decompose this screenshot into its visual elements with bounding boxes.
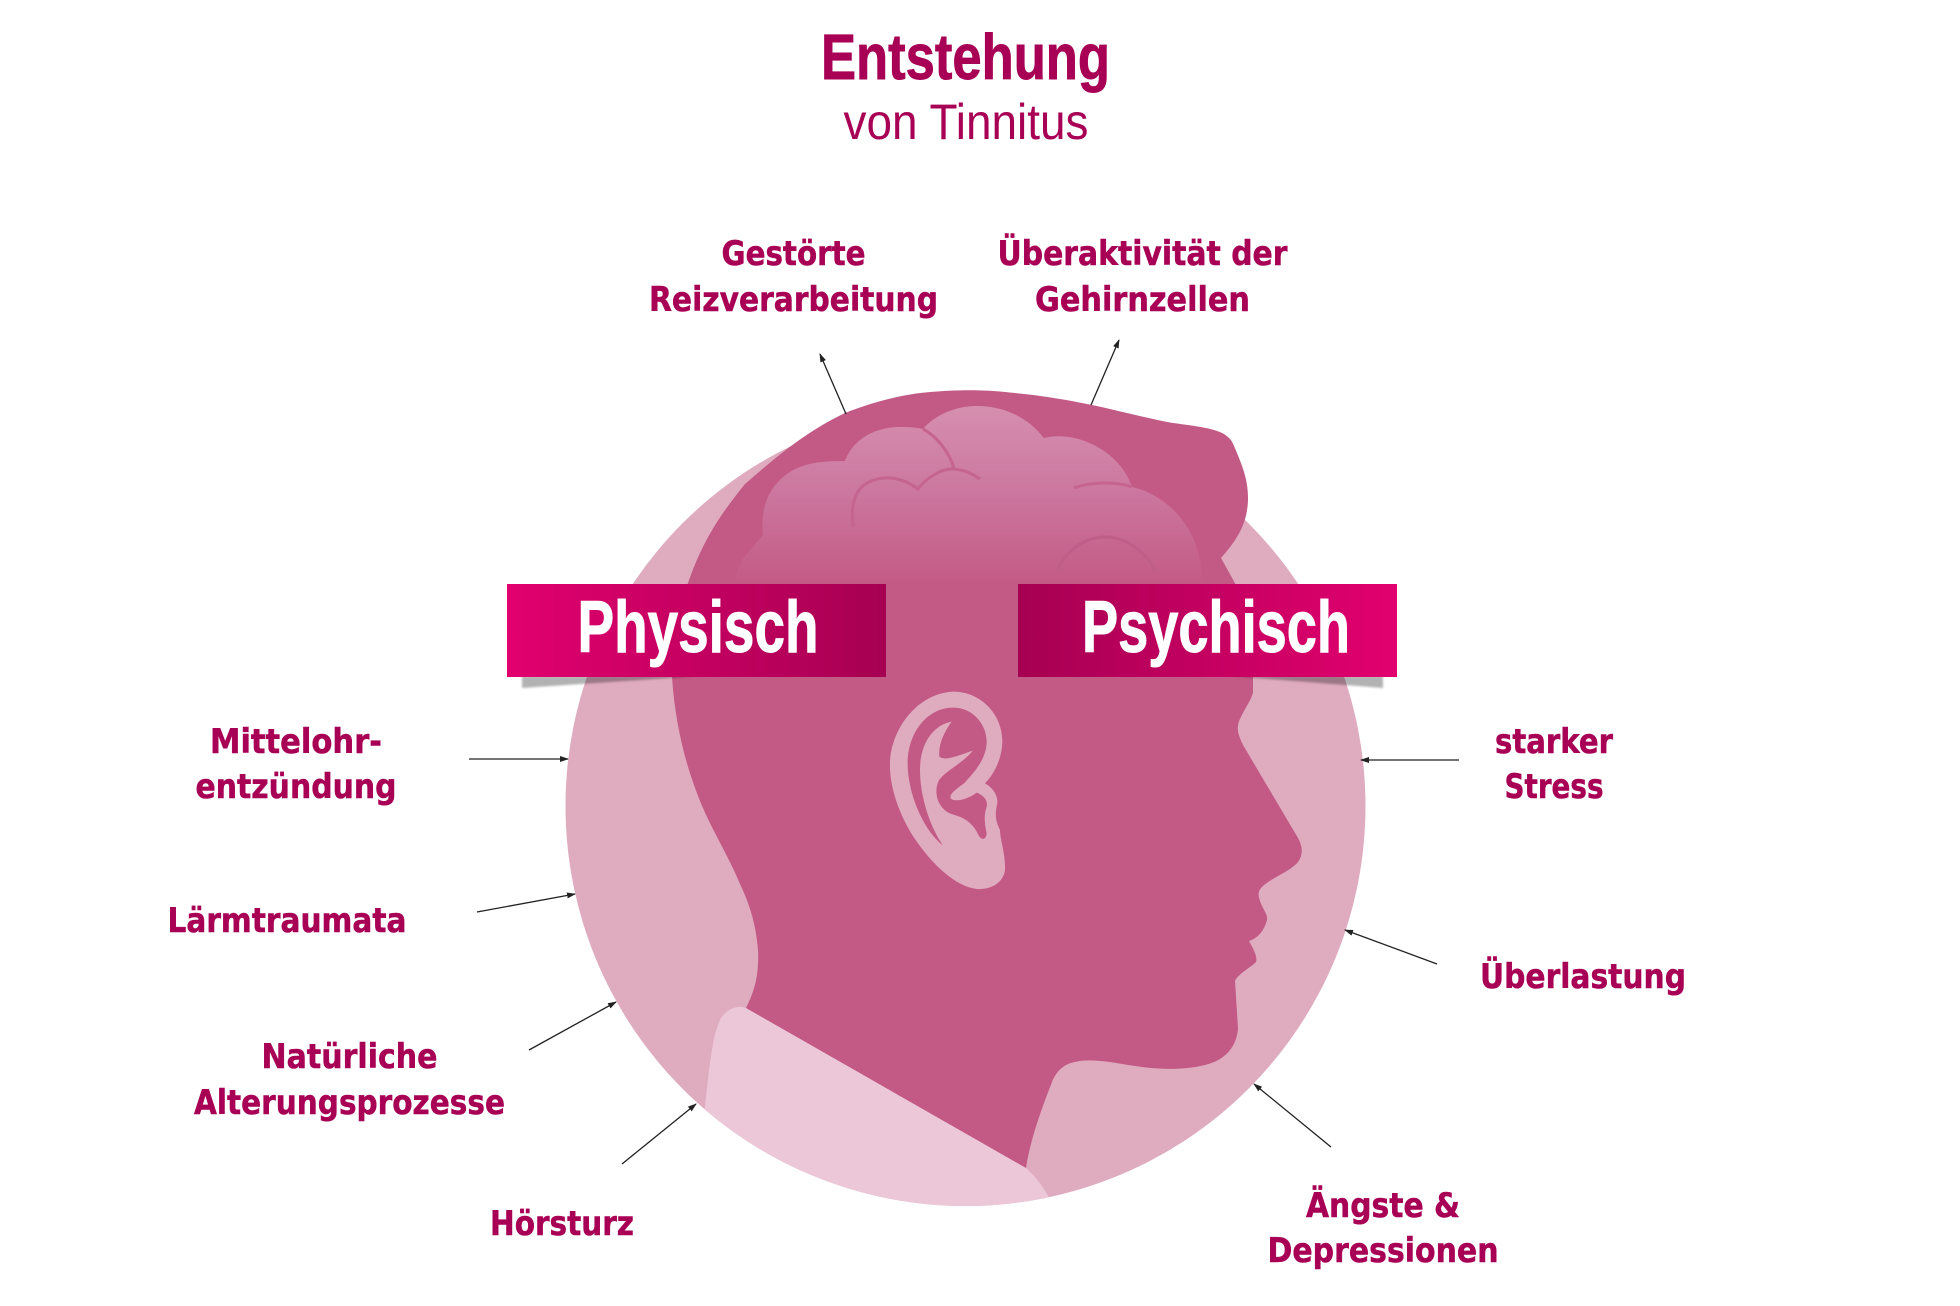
label: Gestörte Reizverarbeitung: Reizverarbeitung — [649, 280, 938, 319]
label: Ängste & Depressionen: Depressionen — [1268, 1231, 1498, 1270]
arrow: Überlastung — [1345, 930, 1437, 964]
label: Natürliche Alterungsprozesse: Natürliche — [262, 1037, 438, 1076]
label: Überaktivität der Gehirnzellen: Gehirnzellen — [1035, 280, 1250, 319]
brain — [735, 406, 1201, 583]
label: Gestörte Reizverarbeitung — [649, 234, 938, 319]
label: Überlastung: Überlastung — [1480, 956, 1686, 996]
label: Hörsturz: Hörsturz — [490, 1204, 634, 1243]
icon: ear — [890, 692, 1005, 889]
banner: Physisch: Physisch — [578, 587, 818, 668]
label: Ängste & Depressionen: Ängste & — [1306, 1185, 1460, 1225]
background circle — [566, 406, 1366, 1206]
arrow: Ängste & Depressionen — [1254, 1084, 1331, 1147]
label: Gestörte Reizverarbeitung: Gestörte — [722, 234, 866, 273]
arrow: Gestörte Reizverarbeitung — [820, 354, 846, 414]
label: Mittelohrentzündung — [196, 722, 396, 806]
banner: Physisch — [507, 584, 886, 688]
banner: Psychisch — [1018, 584, 1397, 688]
arrow: Hörsturz — [622, 1104, 696, 1164]
arrow: starker Stress — [1361, 759, 1459, 761]
label: Ängste & Depressionen — [1268, 1185, 1498, 1270]
brain creases — [852, 429, 1156, 573]
label: Lärmtraumata: Lärmtraumata — [168, 901, 406, 940]
label: Überaktivität der Gehirnzellen: Überaktivität der — [998, 233, 1288, 273]
label: Mittelohrentzündung: Mittelohr- — [210, 722, 382, 761]
arrow: Natürliche Alterungsprozesse — [529, 1002, 616, 1050]
arrow: Mittelohrentzündung — [469, 758, 568, 760]
title: Entstehung — [821, 21, 1110, 93]
head silhouette — [672, 390, 1302, 1168]
banner: Psychisch: Psychisch — [1082, 587, 1350, 668]
label: starker Stress: starker — [1495, 722, 1613, 761]
label: Mittelohrentzündung: entzündung — [196, 767, 396, 806]
label: starker Stress — [1495, 722, 1613, 806]
arrow: Lärmtraumata — [477, 894, 575, 912]
title — [821, 21, 1110, 150]
label: Überaktivität der Gehirnzellen — [998, 233, 1288, 319]
label: Natürliche Alterungsprozesse — [194, 1037, 505, 1122]
collar — [704, 1007, 1048, 1206]
title: von Tinnitus — [844, 94, 1088, 150]
label: starker Stress: Stress — [1504, 767, 1604, 806]
label: Natürliche Alterungsprozesse: Alterungsprozesse — [194, 1083, 505, 1122]
arrow: Überaktivität der Gehirnzellen — [1091, 340, 1119, 405]
head illustration — [566, 390, 1366, 1240]
